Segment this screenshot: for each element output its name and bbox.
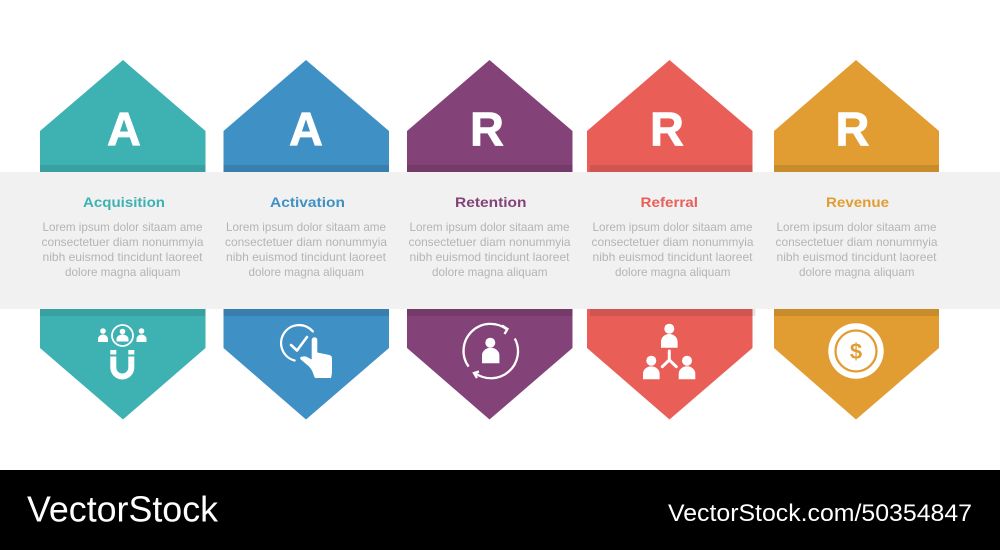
- description: Retention: consectetuer diam nonummyia: [408, 235, 571, 249]
- description: Referral: nibh euismod tincidunt laoreet: [592, 250, 753, 264]
- description: Activation: consectetuer diam nonummyia: [225, 235, 387, 249]
- letter R: R: [470, 103, 504, 156]
- description: Acquisition: nibh euismod tincidunt laoreet: [42, 250, 203, 264]
- footer brand: VectorStock: [27, 488, 219, 530]
- description: Activation: [225, 220, 387, 279]
- description: Referral: consectetuer diam nonummyia: [592, 235, 754, 249]
- letter R: R: [836, 103, 869, 156]
- icon: person in circular arrows: [464, 324, 518, 378]
- description: Acquisition: Lorem ipsum dolor sitaam ame: [42, 220, 203, 234]
- top pentagon: Referral: [587, 60, 752, 172]
- top pentagon: Activation: [224, 60, 389, 172]
- top pentagon: Revenue: [774, 60, 939, 172]
- column: Referral: [587, 60, 756, 420]
- letter R: R: [650, 103, 684, 156]
- heading: Revenue: Revenue: [826, 194, 889, 210]
- top pentagon: Retention: [407, 60, 572, 172]
- heading: Activation: Activation: [270, 194, 345, 210]
- description: Activation: Lorem ipsum dolor sitaam ame: [226, 220, 386, 234]
- description: Activation: dolore magna aliquam: [248, 265, 364, 279]
- description: Acquisition: consectetuer diam nonummyia: [42, 235, 204, 249]
- column: Acquisition: [40, 60, 206, 420]
- description: Referral: [592, 220, 754, 279]
- description: Retention: nibh euismod tincidunt laoreet: [410, 250, 570, 264]
- central grey band: [0, 172, 1000, 309]
- letter A: A: [107, 103, 141, 156]
- description: Revenue: dolore magna aliquam: [799, 265, 914, 279]
- column: Activation: [224, 60, 389, 420]
- description: Acquisition: [42, 220, 204, 279]
- bottom pentagon: Acquisition: [40, 309, 206, 420]
- description: Referral: Lorem ipsum dolor sitaam ame: [592, 220, 753, 234]
- icon: dollar coin: [828, 323, 884, 379]
- bottom pentagon: Retention: [407, 309, 572, 420]
- letter A: A: [289, 103, 323, 156]
- bottom pentagon: Activation: [224, 309, 389, 420]
- footer bar: [0, 470, 1000, 550]
- description: Revenue: nibh euismod tincidunt laoreet: [776, 250, 937, 264]
- heading: Referral: Referral: [640, 194, 698, 210]
- description: Retention: dolore magna aliquam: [432, 265, 548, 279]
- description: Revenue: consectetuer diam nonummyia: [776, 235, 938, 249]
- icon: magnet attracting people: [98, 325, 146, 380]
- column: Revenue: [774, 60, 939, 420]
- description: Retention: Lorem ipsum dolor sitaam ame: [410, 220, 570, 234]
- footer image id: VectorStock.com/50354847: [668, 500, 972, 527]
- description: Activation: nibh euismod tincidunt laoreet: [226, 250, 387, 264]
- description: Revenue: Lorem ipsum dolor sitaam ame: [776, 220, 937, 234]
- heading: Acquisition: Acquisition: [83, 194, 165, 210]
- icon: referral network of people: [643, 324, 695, 379]
- description: Referral: dolore magna aliquam: [615, 265, 730, 279]
- icon: check mark and pointing hand: [281, 325, 332, 378]
- description: Acquisition: dolore magna aliquam: [65, 265, 180, 279]
- heading: Retention: Retention: [455, 194, 526, 210]
- column: Retention: [407, 60, 572, 420]
- bottom pentagon: Revenue: [774, 309, 939, 420]
- description: Retention: [408, 220, 571, 279]
- icon: dollar coin: $: [850, 339, 862, 364]
- description: Revenue: [776, 220, 938, 279]
- bottom pentagon: Referral: [587, 309, 756, 420]
- top pentagon: Acquisition: [40, 60, 206, 172]
